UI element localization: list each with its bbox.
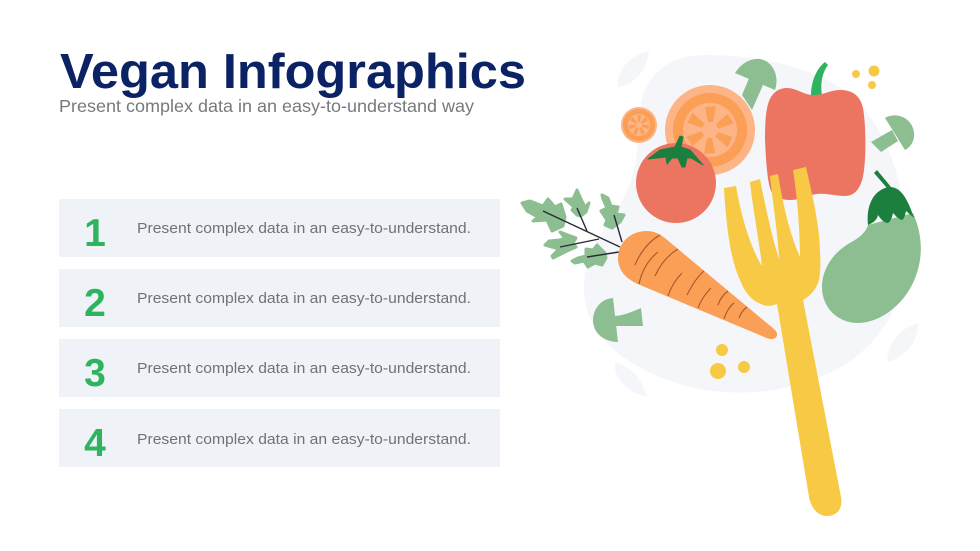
title: Vegan Infographics: [60, 45, 526, 99]
number 2: 2: [84, 282, 106, 325]
row 4 text: Present complex data in an easy-to-understand.: [137, 431, 471, 448]
list row 3: [59, 339, 500, 397]
carrot leaves: [522, 190, 624, 267]
number 1: 1: [84, 212, 106, 255]
tomato: [636, 136, 716, 223]
background blob: [584, 55, 906, 393]
mushroom bottom left: [593, 298, 643, 342]
mushroom right: [871, 115, 914, 152]
eggplant: [822, 170, 921, 323]
row 2 text: Present complex data in an easy-to-understand.: [137, 290, 471, 307]
eggplant stem: [874, 170, 891, 188]
list row 1: [59, 199, 500, 257]
pepper body: [765, 88, 865, 200]
number 4: 4: [84, 422, 106, 465]
illustration: vegetables on a fork: [522, 51, 921, 516]
list row 2: [59, 269, 500, 327]
bell pepper: [765, 62, 865, 200]
carrot body: [618, 231, 777, 339]
decorative leaf right: [887, 323, 918, 362]
row 3 text: Present complex data in an easy-to-understand.: [137, 360, 471, 377]
number 3: 3: [84, 352, 106, 395]
carrot ridges: [635, 235, 747, 319]
list row 4: [59, 409, 500, 467]
tomato stem and calyx: [648, 136, 703, 167]
small orange slice: [621, 107, 657, 143]
mushroom top: [735, 59, 777, 110]
pepper stem: [811, 62, 828, 96]
eggplant calyx: [868, 187, 914, 225]
yellow dots top: [852, 66, 880, 89]
decorative leaf bottom left: [615, 362, 646, 396]
carrot: [522, 190, 777, 339]
yellow dots bottom: [710, 344, 750, 379]
eggplant body: [822, 213, 921, 323]
subtitle: Present complex data in an easy-to-understand way: [59, 96, 474, 116]
row 1 text: Present complex data in an easy-to-understand.: [137, 220, 471, 237]
fork: [724, 167, 841, 516]
decorative leaf top: [618, 51, 649, 87]
large orange slice: [665, 85, 755, 175]
carrot stems: [543, 208, 622, 257]
